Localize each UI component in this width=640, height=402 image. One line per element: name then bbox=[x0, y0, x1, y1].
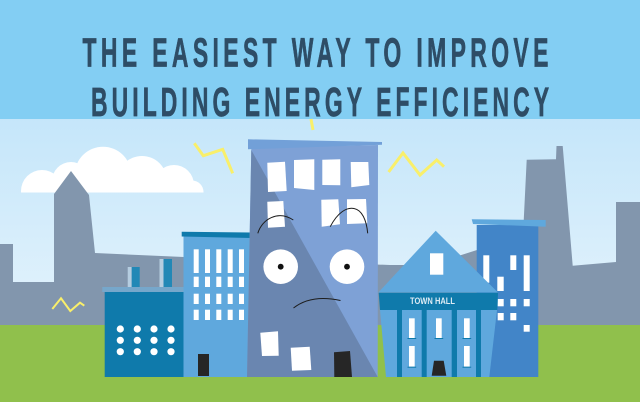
cloud bbox=[21, 146, 204, 192]
left eye bbox=[263, 249, 298, 284]
right eye bbox=[330, 249, 364, 284]
title line 1: THE EASIEST WAY TO IMPROVE bbox=[82, 31, 548, 77]
right eyebrow bbox=[330, 208, 368, 233]
lightning: right of tower bbox=[389, 153, 444, 175]
sky background bbox=[0, 119, 640, 329]
factory roof bbox=[102, 287, 184, 292]
skyline right bbox=[524, 146, 640, 326]
mid-rise door bbox=[198, 354, 209, 376]
lawn bbox=[0, 325, 640, 402]
town hall body bbox=[380, 310, 497, 377]
lightning: left of tower bbox=[194, 143, 233, 173]
lightning: small top bbox=[311, 119, 313, 130]
factory windows bbox=[117, 325, 175, 355]
grey city skyline bbox=[0, 146, 640, 326]
mid-rise windows bbox=[194, 249, 244, 320]
town hall windows bbox=[409, 318, 470, 367]
attic window bbox=[430, 253, 443, 275]
lightning: small left bbox=[52, 298, 84, 311]
factory building bbox=[102, 259, 184, 377]
chimney 2 bbox=[160, 259, 172, 287]
title line 2: BUILDING ENERGY EFFICIENCY bbox=[91, 80, 549, 126]
left eyebrow bbox=[258, 216, 293, 233]
chimney 1 bbox=[128, 267, 140, 287]
factory body bbox=[105, 292, 184, 377]
tower shadow bbox=[247, 150, 378, 377]
tower door bbox=[334, 351, 352, 377]
tower windows bbox=[260, 159, 369, 371]
tower body bbox=[247, 145, 378, 377]
mid-rise blue building bbox=[182, 232, 252, 377]
title bbox=[82, 31, 549, 126]
right tower windows bbox=[483, 255, 530, 332]
main tower with worried face bbox=[247, 139, 382, 377]
mid-rise body bbox=[184, 236, 252, 377]
title banner bbox=[0, 0, 640, 119]
mid-rise roof bbox=[182, 232, 251, 238]
right blue tower bbox=[472, 219, 546, 377]
town hall sign band bbox=[379, 293, 498, 310]
window sills bbox=[408, 338, 471, 368]
right tower body bbox=[477, 225, 538, 377]
town hall roof bbox=[378, 231, 498, 292]
skyline left bbox=[0, 171, 524, 326]
town hall columns bbox=[397, 310, 481, 377]
right tower roof bbox=[472, 219, 546, 227]
mouth bbox=[294, 298, 340, 308]
tower roof bbox=[248, 139, 382, 149]
town hall label: TOWN HALL bbox=[410, 296, 455, 306]
town hall bbox=[378, 231, 498, 377]
town hall door bbox=[432, 361, 446, 376]
